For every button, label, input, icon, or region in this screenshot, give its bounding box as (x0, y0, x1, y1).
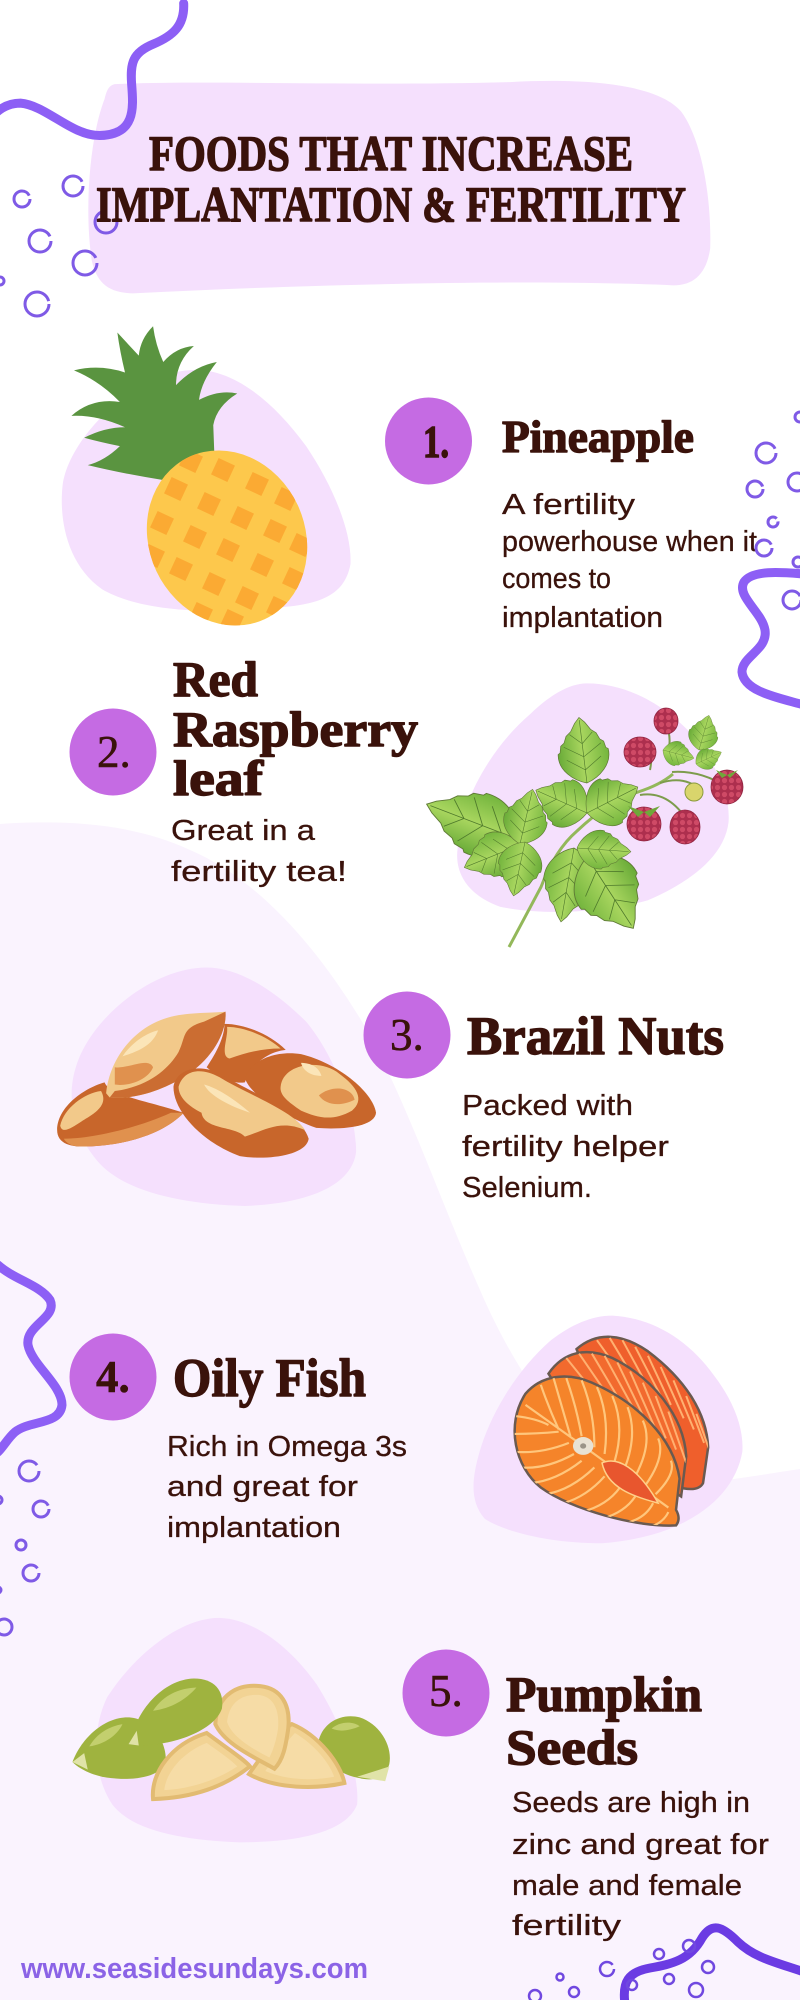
decoration: bottom right squiggle (624, 1928, 800, 2000)
number badge 1: 1. (423, 417, 449, 467)
panel: brazil nuts (57, 967, 376, 1206)
icon: salmon steaks (513, 1337, 712, 1528)
text: brazil nuts description: fertility helper (462, 1131, 669, 1163)
heading: Oily Fish: Oily Fish (173, 1348, 366, 1408)
panel: oily fish (474, 1316, 743, 1543)
seeds blob (96, 1618, 357, 1842)
heading: Red Raspberry leaf: leaf (173, 750, 265, 806)
text: oily fish description: implantation (167, 1512, 341, 1544)
heading: Pumpkin Seeds: Pumpkin (506, 1666, 702, 1722)
decoration: right bubbles (747, 412, 800, 609)
fish blob (474, 1316, 743, 1543)
heading: Red Raspberry leaf (173, 651, 418, 806)
decoration: bottom right bubbles (529, 1940, 714, 2000)
nuts blob (72, 967, 356, 1206)
icon: brazil nuts (57, 1012, 376, 1158)
text: pumpkin seeds description: Seeds are high in (512, 1787, 750, 1819)
number badge 1 (385, 398, 472, 484)
text: pumpkin seeds description: zinc and great for (512, 1829, 769, 1861)
text: pineapple description: comes to (502, 563, 611, 595)
text: brazil nuts description: Selenium. (462, 1172, 592, 1204)
text: raspberry leaf description (171, 815, 347, 888)
number badge 4 (70, 1334, 156, 1420)
number badge 5 (402, 1650, 490, 1736)
heading: Red Raspberry leaf: Red (173, 651, 258, 707)
pineapple blob (62, 370, 351, 611)
decoration: top left squiggle (0, 3, 184, 136)
text: pineapple description: powerhouse when it (502, 526, 757, 558)
text: brazil nuts description (462, 1090, 669, 1204)
number badge 3: 3. (390, 1010, 424, 1060)
title background blob (88, 81, 710, 293)
text: pineapple description (502, 489, 757, 634)
heading: Pumpkin Seeds: Seeds (506, 1719, 638, 1775)
text: pumpkin seeds description: fertility (512, 1910, 622, 1942)
number badge 5: 5. (429, 1666, 463, 1716)
background wave (0, 822, 800, 2000)
icon: raspberry branch (415, 708, 743, 947)
heading: Brazil Nuts: Brazil Nuts (467, 1006, 724, 1066)
icon: pumpkin seeds (72, 1679, 390, 1799)
text: oily fish description: Rich in Omega 3s (167, 1431, 407, 1463)
number badge 2 (70, 708, 156, 796)
heading: Pineapple: Pineapple (502, 411, 694, 462)
text: pumpkin seeds description: male and female (512, 1870, 742, 1902)
text: pineapple description: implantation (502, 602, 663, 634)
text: pineapple description: A fertility (502, 489, 636, 521)
panel: raspberry leaf (415, 683, 743, 947)
panel: pumpkin seeds (72, 1618, 390, 1842)
icon: pineapple body (146, 450, 308, 626)
text: oily fish description (167, 1431, 407, 1544)
decoration: right squiggle (742, 572, 800, 705)
decoration: left bubbles (0, 1461, 49, 1635)
raspberry blob (457, 683, 729, 912)
decoration: top left bubbles (0, 176, 117, 316)
number badge 3 (364, 992, 450, 1078)
title (96, 125, 686, 232)
text: raspberry leaf description: fertility tea! (171, 856, 347, 888)
number badge 2: 2. (97, 727, 131, 777)
text: raspberry leaf description: Great in a (171, 815, 316, 847)
panel: pineapple (62, 326, 351, 652)
text: pumpkin seeds description (512, 1787, 769, 1942)
decoration: left squiggle (0, 1265, 62, 1452)
heading: Pumpkin Seeds (506, 1666, 702, 1775)
heading: Red Raspberry leaf: Raspberry (173, 701, 418, 757)
icon: pineapple crown (71, 326, 237, 480)
footer website: www.seasidesundays.com (20, 1953, 368, 1985)
number badge 4: 4. (96, 1352, 130, 1402)
text: brazil nuts description: Packed with (462, 1090, 633, 1122)
text: oily fish description: and great for (167, 1471, 358, 1503)
title: FOODS THAT INCREASE (149, 125, 633, 181)
